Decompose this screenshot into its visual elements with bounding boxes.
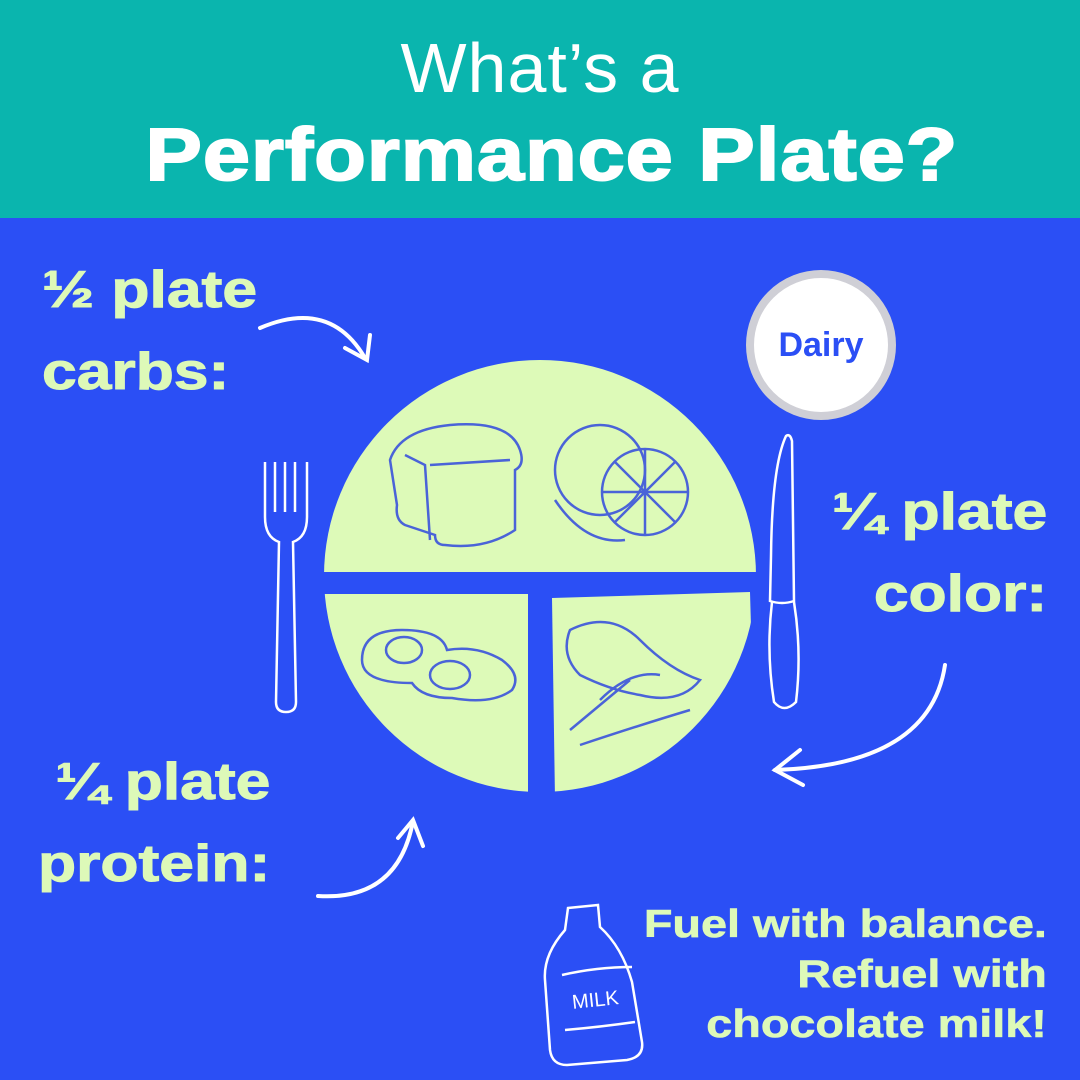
title line 2: Performance Plate?: [146, 113, 958, 196]
icon: knife: [769, 435, 799, 708]
header: [0, 0, 1080, 218]
label: carbs: ½ plate: [42, 261, 257, 319]
arrow: color: [775, 665, 945, 785]
tagline: [644, 903, 1047, 1046]
icon: fork: [265, 462, 307, 712]
plate: [324, 360, 756, 792]
label: carbs: [42, 261, 257, 401]
label: protein: [38, 753, 270, 893]
tagline: Fuel with balance.: [644, 903, 1047, 946]
label: color: ¼ plate: [832, 483, 1047, 541]
label: protein: ¼ plate: [55, 753, 270, 811]
label: color: color:: [874, 565, 1047, 623]
label: protein: protein:: [38, 835, 270, 893]
icon: eggs: [362, 630, 515, 700]
title line 1: What’s a: [400, 29, 680, 107]
tagline: chocolate milk!: [706, 1003, 1047, 1046]
label: carbs: carbs:: [42, 343, 229, 401]
plate and drawings: [258, 316, 947, 1066]
icon: spinach: [567, 622, 700, 745]
arrow: carbs: [260, 318, 370, 360]
icon: orange: [555, 425, 688, 540]
arrow: protein: [318, 820, 423, 896]
icon: milk bottle: MILK: [571, 987, 620, 1014]
tagline: Refuel with: [797, 953, 1047, 996]
dairy circle: [746, 270, 896, 420]
dairy circle: Dairy: [778, 326, 864, 364]
label: color: [832, 483, 1047, 623]
icon: bread: [390, 424, 522, 546]
icon: milk bottle: [545, 905, 642, 1065]
